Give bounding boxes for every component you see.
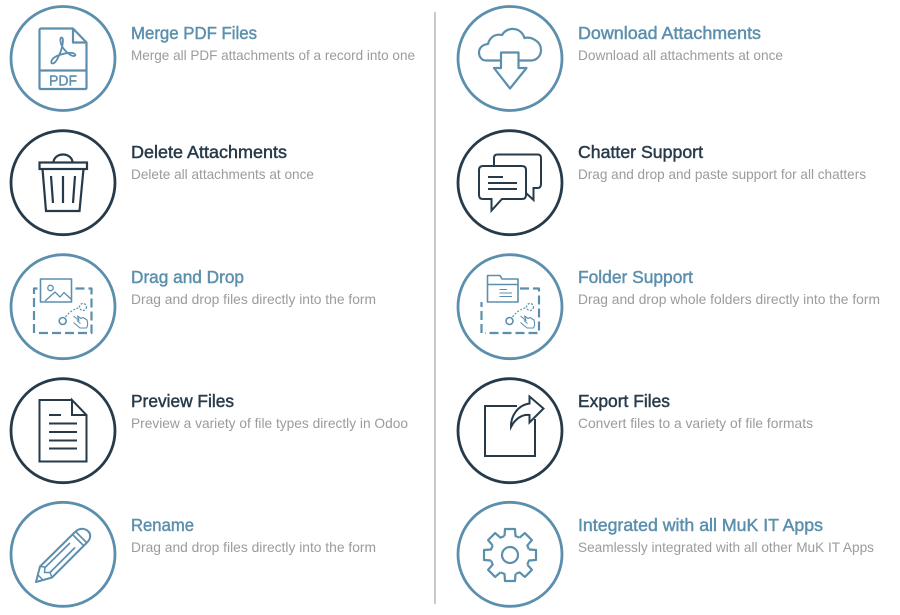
description: Drag and Drop: Drag and drop files directly into the form	[131, 291, 376, 307]
description: Preview Files: Preview a variety of file types directly in Odoo	[131, 415, 408, 431]
heading: Drag and Drop: Drag and Drop	[131, 267, 244, 287]
icon: export arrow	[458, 379, 562, 483]
description: Rename: Drag and drop files directly into the form	[131, 539, 376, 555]
icon: chat bubbles	[458, 131, 562, 235]
heading: Merge PDF Files: Merge PDF Files	[131, 23, 257, 43]
feature: Chatter Support	[458, 131, 866, 235]
heading: Download Attachments: Download Attachments	[578, 23, 761, 43]
feature: Drag and Drop	[11, 255, 376, 359]
description: Export Files: Convert files to a variety of file formats	[578, 415, 813, 431]
description: Download Attachments: Download all attachments at once	[578, 47, 783, 63]
feature: Merge PDF Files	[11, 6, 415, 110]
description: Chatter Support: Drag and drop and paste support for all chatters	[578, 166, 866, 182]
description: Delete Attachments: Delete all attachments at once	[131, 166, 314, 182]
feature: Folder Support	[458, 255, 880, 359]
icon: pencil	[11, 502, 115, 606]
icon: drag and drop folder	[458, 255, 562, 359]
heading: Folder Support: Folder Support	[578, 267, 693, 287]
feature: Delete Attachments	[11, 131, 314, 235]
icon: document	[11, 379, 115, 483]
feature: Integrated with all MuK IT Apps	[458, 502, 874, 606]
description: Integrated with all MuK IT Apps: Seamlessly integrated with all other MuK IT Apps	[578, 539, 874, 555]
divider between columns	[434, 12, 436, 604]
icon: cloud download	[458, 6, 562, 110]
heading: Export Files: Export Files	[578, 391, 670, 411]
heading: Preview Files: Preview Files	[131, 391, 234, 411]
heading: Integrated with all MuK IT Apps: Integrated with all MuK IT Apps	[578, 515, 823, 535]
icon: drag and drop image	[11, 255, 115, 359]
icon: PDF file	[11, 6, 115, 110]
feature: Rename	[11, 502, 376, 606]
description: Folder Support: Drag and drop whole folders directly into the form	[578, 291, 880, 307]
heading: Chatter Support: Chatter Support	[578, 142, 703, 162]
heading: Delete Attachments: Delete Attachments	[131, 142, 287, 162]
feature: Preview Files	[11, 379, 408, 483]
feature: Export Files	[458, 379, 813, 483]
icon: gear	[458, 502, 562, 606]
icon: PDF file: PDF	[49, 73, 77, 90]
feature: Download Attachments	[458, 6, 783, 110]
description: Merge PDF Files: Merge all PDF attachments of a record into one	[131, 47, 415, 63]
icon: trash can	[11, 131, 115, 235]
heading: Rename: Rename	[131, 515, 194, 535]
